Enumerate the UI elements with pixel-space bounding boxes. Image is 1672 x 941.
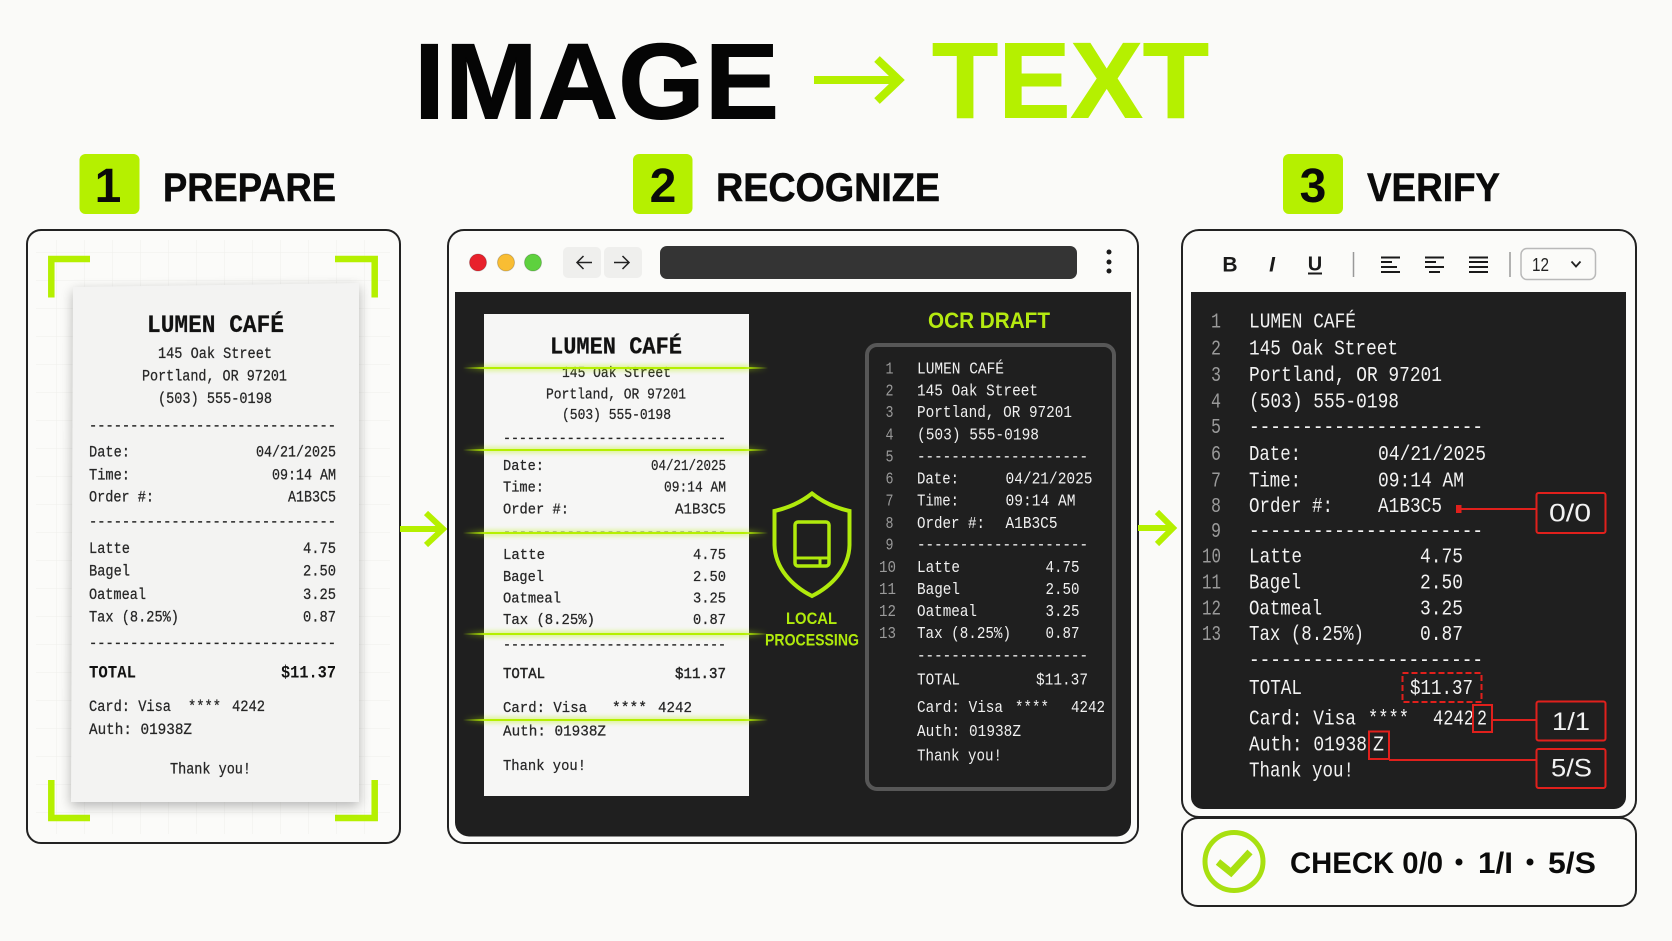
receipt: being scanned: **** [612, 700, 647, 717]
receipt: being scanned: Bagel [503, 569, 544, 586]
line numbers: 1 [886, 360, 894, 378]
red highlight: digit 2 [1473, 705, 1492, 732]
icon: check mark [1205, 832, 1263, 890]
receipt: original: Time: [89, 466, 130, 484]
editor toolbar: B [1222, 254, 1238, 276]
panel: OCR draft output: (503) 555-0198 [917, 426, 1039, 444]
verified text lines: TOTAL [1249, 678, 1302, 701]
browser traffic lights [470, 254, 542, 271]
receipt: being scanned: A1B3C5 [675, 502, 726, 518]
receipt: being scanned: $11.37 [675, 666, 726, 683]
panel: OCR draft output: Order #: [917, 514, 985, 533]
receipt: original: **** [188, 698, 221, 716]
heading: OCR draft: OCR DRAFT [928, 308, 1051, 333]
dark code editor [1191, 292, 1626, 809]
receipt: being scanned: 145 Oak Street [562, 365, 671, 382]
editor toolbar: U [1308, 254, 1322, 276]
verified text lines: Auth: 01938 [1249, 734, 1367, 758]
panel: OCR draft output: A1B3C5 [1006, 514, 1058, 533]
receipt: being scanned: 4242 [658, 700, 692, 717]
line numbers: 12 [1202, 598, 1221, 622]
receipt: being scanned: 0.87 [693, 612, 726, 629]
check text: CHECK 0/0 [1290, 847, 1443, 880]
browser address bar [660, 246, 1077, 279]
panel: OCR draft output: $11.37 [1036, 670, 1088, 690]
receipt: original: Latte [89, 540, 130, 558]
receipt: original: 0.87 [303, 608, 336, 626]
receipt: being scanned: ---------------------------- [503, 637, 726, 654]
receipt: being scanned: Latte [503, 547, 545, 564]
step 3 heading: 3 [1300, 160, 1326, 213]
callout: 0/0: 0/0 [1549, 500, 1591, 528]
receipt: original: (503) 555-0198 [158, 390, 272, 408]
panel: OCR draft output: -------------------- [917, 536, 1088, 554]
receipt: original: 3.25 [303, 586, 336, 604]
icon: local processing shield [774, 494, 850, 596]
receipt: being scanned: ---------------------------- [503, 430, 726, 448]
step 3 heading [1283, 154, 1500, 214]
receipt: being scanned: (503) 555-0198 [562, 407, 671, 424]
receipt: being scanned [484, 314, 749, 796]
verified text lines: 09:14 AM [1378, 470, 1464, 494]
receipt: original: 04/21/2025 [256, 444, 336, 462]
receipt: original: LUMEN CAFÉ [147, 310, 284, 340]
receipt: original: Date: [89, 444, 130, 462]
panel: OCR draft output: 04/21/2025 [1006, 470, 1092, 488]
line numbers: 13 [1202, 624, 1221, 647]
receipt: being scanned: Oatmeal [503, 590, 561, 608]
verified text lines: 0.87 [1420, 624, 1463, 647]
label: local processing [765, 609, 859, 650]
line numbers: 13 [879, 624, 896, 643]
panel: OCR draft output: TOTAL [917, 670, 960, 690]
line numbers: 11 [879, 580, 896, 599]
receipt: original: $11.37 [281, 664, 336, 684]
verified text lines: 4.75 [1420, 546, 1463, 570]
verified text lines [1202, 310, 1487, 784]
verified text lines: 2.50 [1420, 572, 1463, 596]
line numbers: 2 [886, 382, 894, 400]
verified text lines: Order #: [1249, 496, 1333, 519]
receipt: original: TOTAL [89, 664, 136, 684]
line numbers: 10 [879, 558, 896, 577]
receipt: original: ------------------------------ [89, 513, 336, 531]
panel: OCR draft output: Latte [917, 558, 960, 577]
arrow: prepare to recognize [400, 513, 443, 545]
panel: OCR draft output: 09:14 AM [1006, 492, 1076, 510]
receipt: being scanned: Tax (8.25%) [503, 612, 595, 629]
line numbers: 6 [886, 470, 894, 488]
receipt: original: Oatmeal [89, 586, 146, 604]
verified text lines: A1B3C5 [1378, 496, 1442, 519]
receipt shadow [71, 287, 359, 806]
dark workspace [455, 292, 1131, 836]
receipt: original: 09:14 AM [272, 466, 336, 484]
line numbers: 11 [1202, 572, 1221, 596]
verified text lines: 3.25 [1420, 598, 1463, 622]
step 1 heading: PREPARE [163, 166, 336, 210]
step 1 heading [80, 154, 336, 214]
panel: OCR draft output: Oatmeal [917, 602, 977, 621]
panel: OCR draft output: Bagel [917, 580, 960, 599]
receipt: original: Portland, OR 97201 [142, 368, 287, 386]
panel: OCR draft output: 0.87 [1046, 624, 1080, 643]
check text: 5/S [1548, 847, 1596, 880]
callout: 1/1: 1/1 [1552, 708, 1590, 736]
receipt: being scanned: Order #: [503, 502, 569, 518]
verified text lines: Latte [1249, 546, 1302, 570]
line numbers: 12 [879, 602, 896, 621]
step 2 heading: RECOGNIZE [716, 166, 940, 210]
callout: 1/1 [1492, 702, 1606, 740]
receipt: being scanned: Date: [503, 458, 544, 475]
verified text lines: $11.37 [1410, 678, 1473, 701]
step 2 heading: 2 [650, 160, 676, 213]
receipt: original: Auth: 01938Z [89, 721, 192, 739]
receipt: original: 4242 [232, 698, 265, 716]
receipt: being scanned: 2.50 [693, 569, 726, 586]
line numbers: 5 [886, 448, 894, 466]
panel: OCR draft output: Tax (8.25%) [917, 624, 1011, 643]
line numbers: 4 [1211, 392, 1221, 414]
verified text lines: 04/21/2025 [1378, 444, 1486, 467]
line numbers: 2 [1211, 338, 1221, 362]
receipt: original: Tax (8.25%) [89, 608, 179, 626]
red highlight: total [1402, 673, 1482, 702]
panel: OCR draft output: Auth: 01938Z [917, 722, 1021, 741]
panel: verify editor [1182, 230, 1636, 817]
title word: IMAGE: IMAGE [414, 20, 779, 142]
receipt: original: 2.50 [303, 562, 336, 580]
panel: OCR draft output: 145 Oak Street [917, 382, 1038, 400]
panel: OCR draft output: 4242 [1071, 698, 1105, 717]
receipt: original: 145 Oak Street [158, 345, 272, 363]
panel: OCR draft output: LUMEN CAFÉ [917, 360, 1004, 378]
receipt: being scanned: 4.75 [693, 547, 726, 564]
line numbers: 3 [886, 403, 894, 422]
line numbers: 8 [1211, 496, 1221, 519]
editor toolbar [1222, 248, 1596, 280]
verified text lines: ---------------------- [1249, 650, 1483, 673]
receipt: original: Order #: [89, 488, 154, 506]
verified text lines: Z [1373, 734, 1384, 758]
editor toolbar: 12 [1532, 255, 1549, 275]
check text: 1/I [1478, 847, 1513, 880]
step 1 heading: 1 [95, 160, 121, 213]
verified text lines: ---------------------- [1249, 417, 1483, 440]
line numbers: 7 [1211, 470, 1221, 494]
verified text lines: 2 [1477, 708, 1487, 732]
verified text lines: Bagel [1249, 572, 1301, 596]
label: local processing: PROCESSING [765, 630, 859, 650]
receipt: being scanned: Card: Visa [503, 700, 587, 717]
line numbers: 9 [886, 536, 894, 554]
arrow: recognize to verify [1138, 512, 1173, 544]
line numbers: 5 [1211, 417, 1221, 440]
receipt: being scanned: Thank you! [503, 758, 586, 775]
step 3 heading: VERIFY [1367, 166, 1500, 210]
receipt: being scanned: Portland, OR 97201 [546, 386, 686, 404]
receipt: original: Thank you! [170, 760, 251, 778]
verified text lines: Thank you! [1249, 760, 1354, 784]
title X notch [1103, 42, 1109, 52]
panel: check reminder [1182, 818, 1636, 906]
panel: recognize browser window [448, 230, 1138, 843]
receipt: original: Card: Visa [89, 698, 171, 716]
editor toolbar: I [1269, 254, 1276, 276]
red highlight: letter Z [1369, 732, 1389, 759]
receipt: original: A1B3C5 [288, 488, 336, 506]
verified text lines: (503) 555-0198 [1249, 392, 1399, 414]
panel: OCR draft output: 4.75 [1046, 558, 1080, 577]
verified text lines: Tax (8.25%) [1249, 624, 1364, 647]
panel: OCR draft output: Time: [917, 492, 959, 510]
panel: OCR draft output: Card: Visa [917, 698, 1003, 717]
verified text lines: LUMEN CAFÉ [1249, 310, 1356, 334]
line numbers: 8 [886, 514, 894, 533]
verified text lines: 145 Oak Street [1249, 338, 1398, 362]
callout: 0/0 [1456, 493, 1606, 533]
verified text lines: **** [1368, 708, 1409, 732]
line numbers [879, 360, 896, 643]
panel: OCR draft output: -------------------- [917, 448, 1088, 466]
label: local processing: LOCAL [786, 609, 837, 628]
callout: 5/S [1389, 749, 1606, 788]
icon: scan corner brackets [51, 259, 375, 818]
line numbers: 9 [1211, 521, 1221, 544]
receipt: original: Bagel [89, 562, 130, 580]
verified text lines: 4242 [1433, 708, 1474, 732]
line numbers: 7 [886, 492, 894, 510]
panel: OCR draft output: 2.50 [1046, 580, 1080, 599]
panel: OCR draft output: **** [1015, 698, 1049, 717]
step 2 heading [633, 154, 940, 214]
receipt: being scanned: 3.25 [693, 590, 726, 608]
verified text lines: Time: [1249, 470, 1301, 494]
verified text lines: Portland, OR 97201 [1249, 365, 1442, 388]
browser nav buttons [563, 247, 642, 278]
receipt: being scanned: Auth: 01938Z [503, 724, 606, 740]
panel: prepare [27, 230, 400, 843]
panel: OCR draft output: Portland, OR 97201 [917, 403, 1072, 422]
receipt: original: ------------------------------ [89, 634, 336, 652]
check text [1290, 847, 1596, 880]
receipt: being scanned: 04/21/2025 [651, 458, 726, 475]
line numbers: 1 [1211, 312, 1221, 334]
panel: OCR draft output: Thank you! [917, 746, 1002, 766]
title [414, 20, 1209, 142]
line numbers: 3 [1211, 365, 1221, 388]
title word: TEXT: TEXT [932, 20, 1209, 140]
panel: OCR draft output: Date: [917, 470, 959, 488]
browser menu dots [1106, 250, 1112, 274]
callout: 5/S: 5/S [1551, 754, 1592, 782]
verified text lines: Card: Visa [1249, 708, 1356, 732]
receipt: being scanned: ---------------------------- [503, 524, 726, 542]
line numbers [1202, 312, 1221, 647]
receipt: being scanned: TOTAL [503, 666, 545, 683]
title arrow [814, 59, 899, 101]
panel: OCR draft output: -------------------- [917, 646, 1088, 666]
receipt: original [71, 283, 359, 802]
panel: OCR draft output: 3.25 [1046, 602, 1080, 621]
receipt: being scanned: 09:14 AM [664, 480, 726, 496]
verified text lines: Oatmeal [1249, 598, 1322, 622]
receipt: being scanned: LUMEN CAFÉ [550, 334, 682, 362]
line numbers: 4 [886, 426, 894, 444]
receipt: being scanned: Time: [503, 480, 544, 496]
panel: OCR draft output [867, 345, 1114, 789]
line numbers: 10 [1202, 546, 1221, 570]
receipt: original: 4.75 [303, 540, 336, 558]
line numbers: 6 [1211, 444, 1221, 467]
verified text lines: Date: [1249, 444, 1301, 467]
receipt: original: ------------------------------ [89, 417, 336, 435]
scan lines [463, 365, 768, 723]
verified text lines: ---------------------- [1249, 521, 1483, 544]
